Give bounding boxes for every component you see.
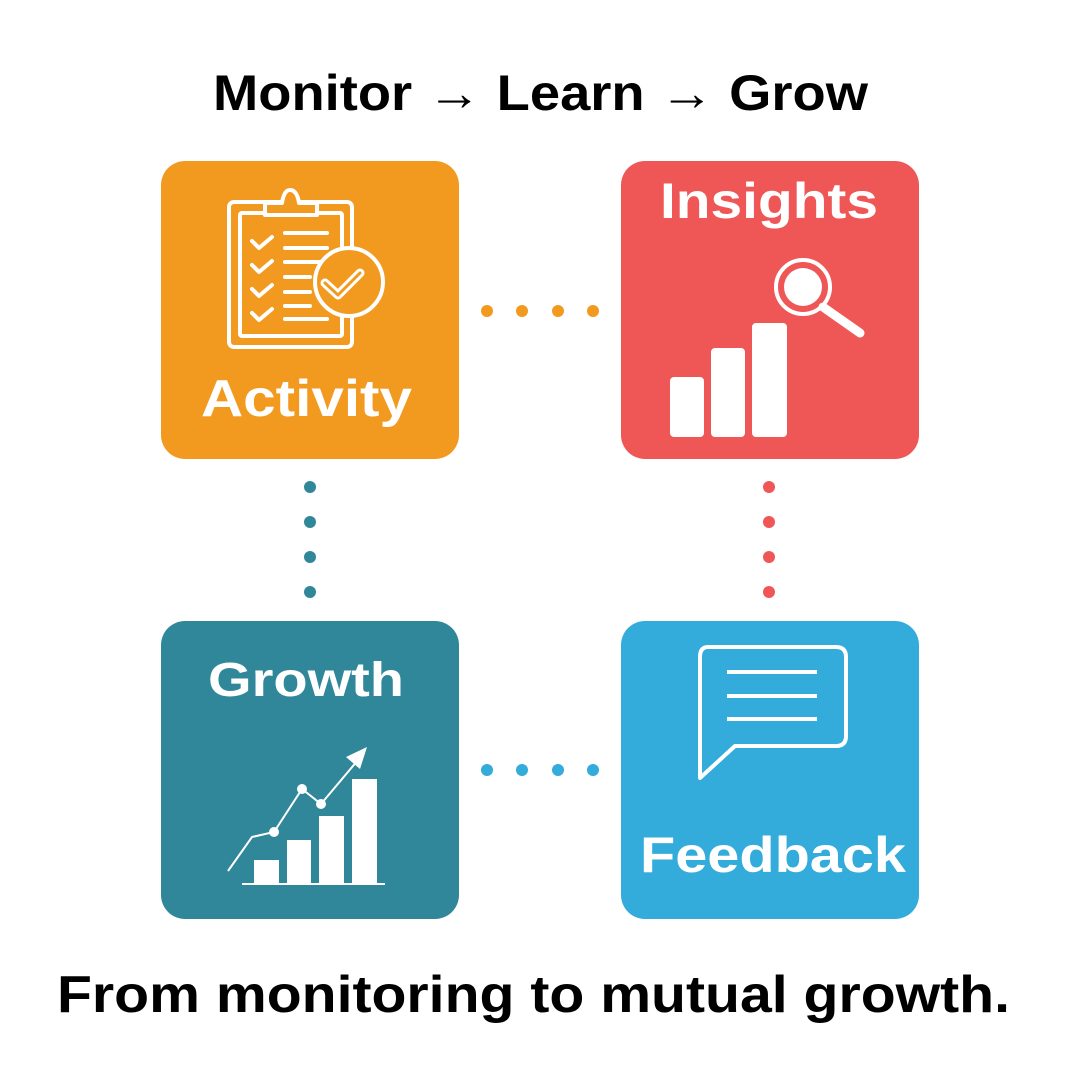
panel: activity <box>161 161 459 459</box>
label: activity: Activity <box>201 370 412 428</box>
tagline: From monitoring to mutual growth. <box>57 966 1010 1024</box>
label: growth: Growth <box>208 654 404 707</box>
panel: growth <box>161 621 459 919</box>
title: Monitor → Learn → Grow <box>213 65 868 121</box>
dots: growth to activity <box>304 481 316 598</box>
dots: insights to feedback <box>763 481 775 598</box>
dots: feedback to growth <box>481 764 599 776</box>
panel: feedback <box>621 621 919 919</box>
panel: insights <box>621 161 919 459</box>
icon: magnifier and bars <box>672 260 860 435</box>
icon: clipboard <box>229 190 383 347</box>
label: feedback: Feedback <box>640 827 906 883</box>
icon: growth chart <box>228 747 385 885</box>
dots: activity to insights <box>481 305 599 317</box>
icon: speech bubble <box>700 647 846 778</box>
label: insights: Insights <box>660 173 878 229</box>
